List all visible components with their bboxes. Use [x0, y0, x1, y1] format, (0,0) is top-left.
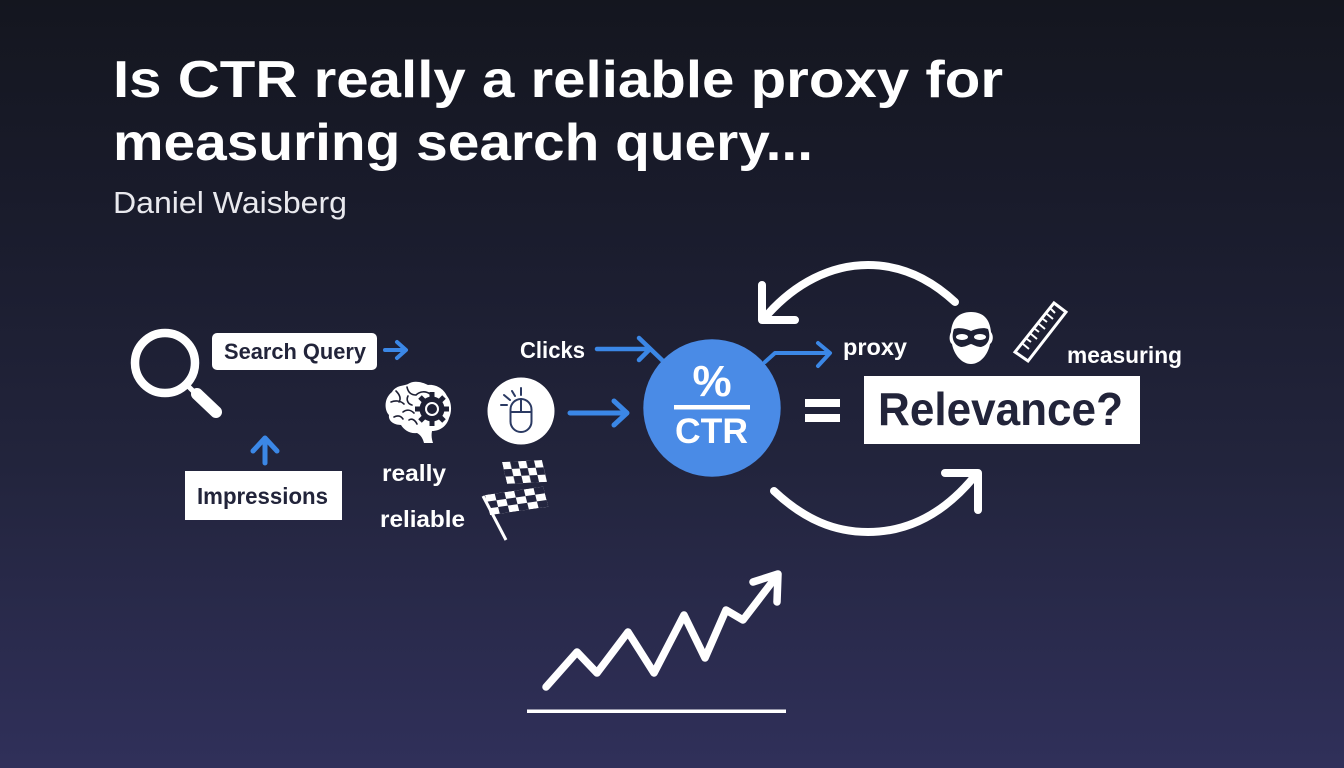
arrow: top feedback loop: [762, 265, 955, 320]
label: Clicks: Clicks: [520, 337, 585, 363]
icon: magnifying glass: [135, 333, 216, 412]
label: proxy: proxy: [843, 334, 907, 360]
equals sign: [805, 399, 840, 422]
label: Search Query: [212, 333, 377, 370]
arrow: query to brain: [385, 342, 406, 358]
arrow: clicks to CTR: [597, 338, 663, 361]
label: Search Query: Search Query: [224, 339, 367, 364]
label: Impressions: Impressions: [197, 483, 328, 509]
label: reliable: reliable: [380, 506, 465, 532]
arrowhead: [753, 574, 778, 602]
icon: brain with gear: [386, 382, 451, 443]
label: measuring: measuring: [1067, 342, 1182, 368]
percent sign: %: [692, 357, 732, 406]
chart baseline: [527, 710, 786, 713]
label: Impressions: [185, 471, 342, 520]
arrow: mouse to CTR: [570, 401, 627, 425]
CTR circle: [643, 339, 781, 477]
arrow: impressions up: [253, 438, 277, 463]
title: measuring search query...: [113, 114, 813, 172]
title: Is CTR really a reliable proxy for: [113, 51, 1003, 109]
icon: checkered flags: [483, 460, 548, 540]
arrow: bottom feedback loop: [774, 473, 978, 532]
arrow: CTR to proxy: [765, 343, 830, 366]
CTR label: CTR: [675, 412, 748, 451]
title: [113, 51, 1003, 172]
icon: masked face: [950, 312, 993, 364]
subtitle: author: Daniel Waisberg: [113, 185, 347, 220]
label: really: really: [382, 460, 446, 486]
icon: mouse click: [488, 378, 554, 444]
icon: ruler: [1015, 303, 1066, 361]
chart: rising trend line: [546, 574, 778, 687]
label: Relevance?: Relevance?: [878, 383, 1123, 435]
